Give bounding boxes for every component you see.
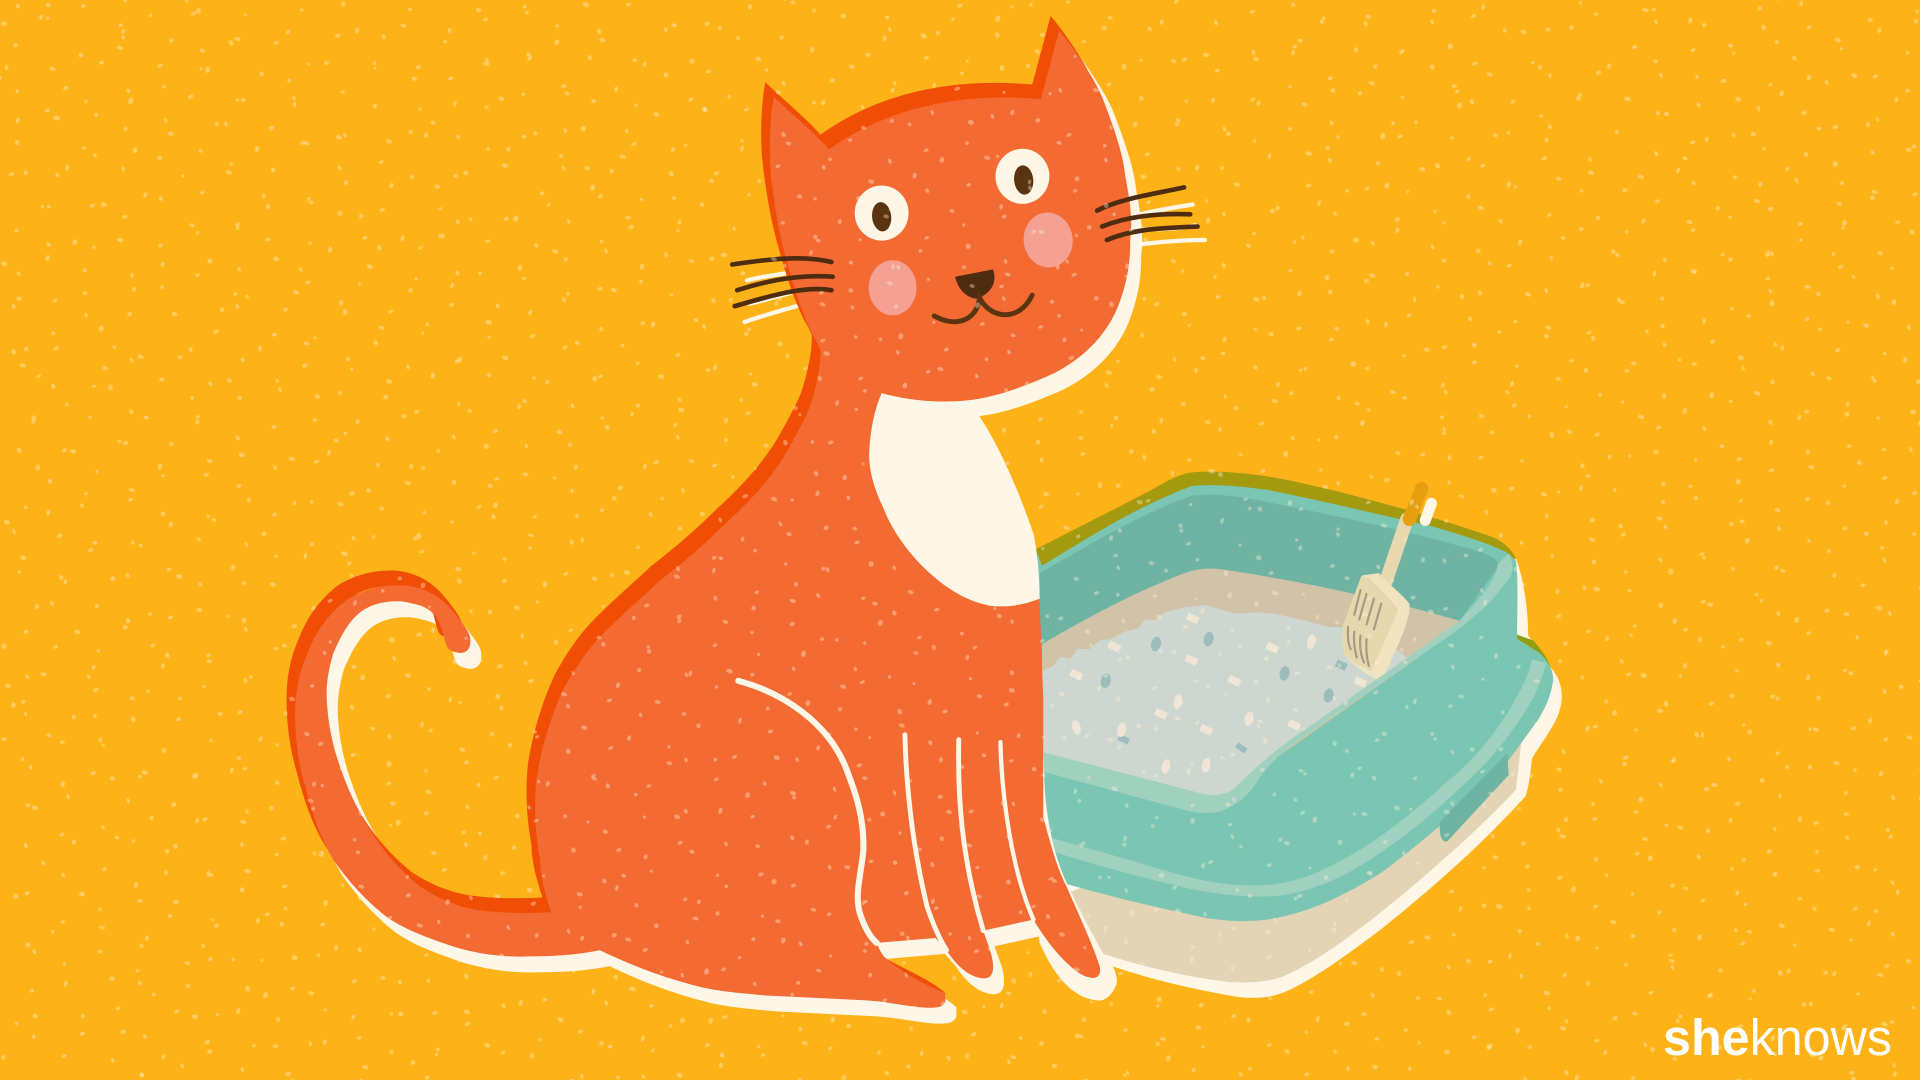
blue litter flecks bbox=[1099, 631, 1348, 754]
litter granules surface bbox=[1042, 605, 1412, 795]
litter box inner rim highlight bbox=[1042, 553, 1513, 813]
cat bbox=[287, 16, 1205, 1008]
litter box lip highlight bbox=[1041, 661, 1539, 889]
right eye bbox=[996, 149, 1049, 204]
scoop handle bbox=[1384, 519, 1407, 588]
mouth bbox=[934, 295, 1032, 322]
right cream whiskers bbox=[1114, 204, 1205, 249]
litter box lower lip bbox=[1041, 612, 1553, 921]
cat chest bib bbox=[869, 393, 1040, 606]
litter box beige base bbox=[1065, 736, 1522, 982]
litter box tan floor bbox=[1042, 569, 1460, 786]
litter box bbox=[1035, 472, 1562, 998]
scoop handle cream shadow bbox=[1425, 503, 1431, 520]
litter box handle clip bbox=[1440, 753, 1509, 841]
litter box inner wall bbox=[1040, 495, 1499, 786]
litter box rim olive back edge bbox=[1035, 472, 1516, 588]
litter box outer front wall bbox=[1037, 485, 1517, 885]
hind foot dark sliver bbox=[887, 959, 945, 993]
right whiskers bbox=[1097, 187, 1198, 240]
litter box lower lip olive edge bbox=[1516, 634, 1550, 666]
scoop head bbox=[1342, 573, 1410, 682]
cat body bbox=[295, 31, 1131, 1008]
left cheek bbox=[869, 260, 917, 315]
left whiskers bbox=[732, 258, 833, 306]
litter scoop bbox=[1342, 489, 1431, 682]
left eye bbox=[855, 186, 909, 241]
cat dark orange edge bbox=[287, 16, 1117, 942]
scoop handle orange tip bbox=[1409, 489, 1422, 519]
nose bbox=[955, 269, 994, 299]
scoop slots bbox=[1348, 590, 1381, 666]
left cream whiskers bbox=[744, 269, 814, 322]
cat leg lines bbox=[738, 681, 1033, 950]
logo: sheknows: sheknows bbox=[1663, 1009, 1892, 1066]
litter box cream outline bbox=[1053, 558, 1562, 998]
cat leg cream outline bbox=[1033, 735, 1117, 1001]
scoop head shaded side bbox=[1342, 576, 1398, 671]
cat cream offset shadow bbox=[305, 45, 1141, 1022]
right cheek bbox=[1020, 209, 1076, 271]
litter pile bbox=[1042, 605, 1412, 795]
cream litter flecks bbox=[1069, 612, 1368, 775]
